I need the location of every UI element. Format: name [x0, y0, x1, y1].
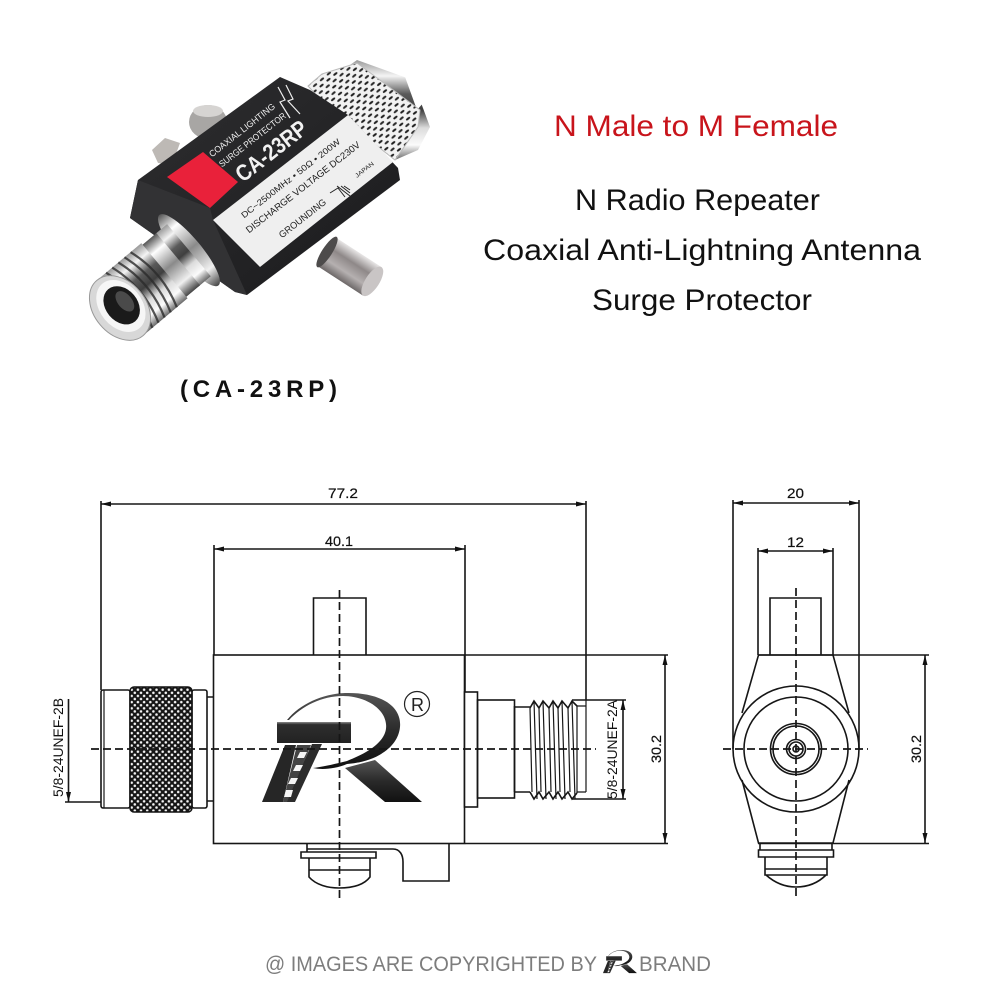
bottom mounting stud and bracket	[301, 844, 449, 888]
registered mark	[404, 692, 430, 716]
grounding pin	[313, 234, 388, 300]
dimension: 77.2: 77.2	[328, 485, 358, 501]
center lines	[723, 748, 868, 750]
white label text: DC~2500MHz • 50Ω • 200W	[239, 136, 342, 220]
side view technical drawing	[50, 485, 668, 900]
dimension: 12	[758, 534, 833, 655]
top pin	[770, 598, 821, 655]
body rectangle	[214, 655, 464, 844]
white label text: DISCHARGE VOLTAGE DC230V	[244, 139, 363, 236]
product description	[483, 184, 921, 317]
footer copyright	[265, 950, 711, 976]
N female connector	[71, 207, 228, 360]
rear knurled UHF connector	[308, 60, 430, 160]
dimension: 77.2	[101, 485, 586, 700]
left N connector with knurl	[101, 687, 213, 812]
dimension: 5/8-24UNEF-2B: 5/8-24UNEF-2B	[50, 698, 66, 797]
dimension: 5/8-24UNEF-2B	[50, 698, 101, 802]
icon: ground symbol	[330, 186, 350, 197]
dimension: 40.1	[214, 533, 465, 692]
dimension: 12: 12	[787, 534, 804, 550]
footer copyright: BRAND	[639, 953, 711, 976]
dimension: 30.2	[465, 655, 668, 844]
dimension: 40.1: 40.1	[325, 533, 353, 549]
dimension: 20	[733, 485, 859, 749]
product description: Coaxial Anti-Lightning Antenna	[483, 234, 921, 267]
registered mark: R	[411, 695, 424, 715]
end view body outline	[742, 655, 849, 843]
dimension: 5/8-24UNEF-2A: 5/8-24UNEF-2A	[604, 699, 620, 799]
footer copyright: @ IMAGES ARE COPYRIGHTED BY	[265, 953, 597, 976]
product description: N Radio Repeater	[575, 184, 820, 217]
end view bottom stud	[758, 844, 834, 887]
black body	[130, 77, 400, 295]
product photo: CA-23RP surge protector	[71, 60, 430, 360]
product description: Surge Protector	[592, 284, 812, 317]
concentric connector circles	[733, 686, 859, 812]
top label text: CA-23RP	[230, 115, 312, 187]
dimension: 5/8-24UNEF-2A	[572, 699, 626, 799]
top grounding pin	[314, 598, 366, 655]
white label text: GROUNDING	[277, 197, 329, 241]
icon: lightning bolts	[278, 85, 300, 118]
dimension: 30.2: 30.2	[648, 735, 664, 763]
top label text: SURGE PROTECTOR	[217, 110, 288, 169]
right connector with thread	[464, 692, 586, 807]
white label text: JAPAN	[355, 161, 376, 180]
top label text	[207, 101, 312, 187]
center lines	[91, 748, 596, 750]
model label: (CA-23RP)	[180, 376, 337, 403]
dimension: 30.2	[758, 655, 929, 844]
red square	[167, 152, 238, 208]
white label	[213, 115, 393, 267]
TR logo	[262, 693, 422, 802]
dimension: 20: 20	[787, 485, 804, 501]
mounting screw lugs	[152, 105, 227, 165]
title: connector type: N Male to M Female	[554, 110, 838, 143]
dimension: 30.2: 30.2	[908, 735, 924, 763]
end view technical drawing	[723, 485, 929, 898]
top label text: COAXIAL LIGHTING	[207, 101, 277, 159]
